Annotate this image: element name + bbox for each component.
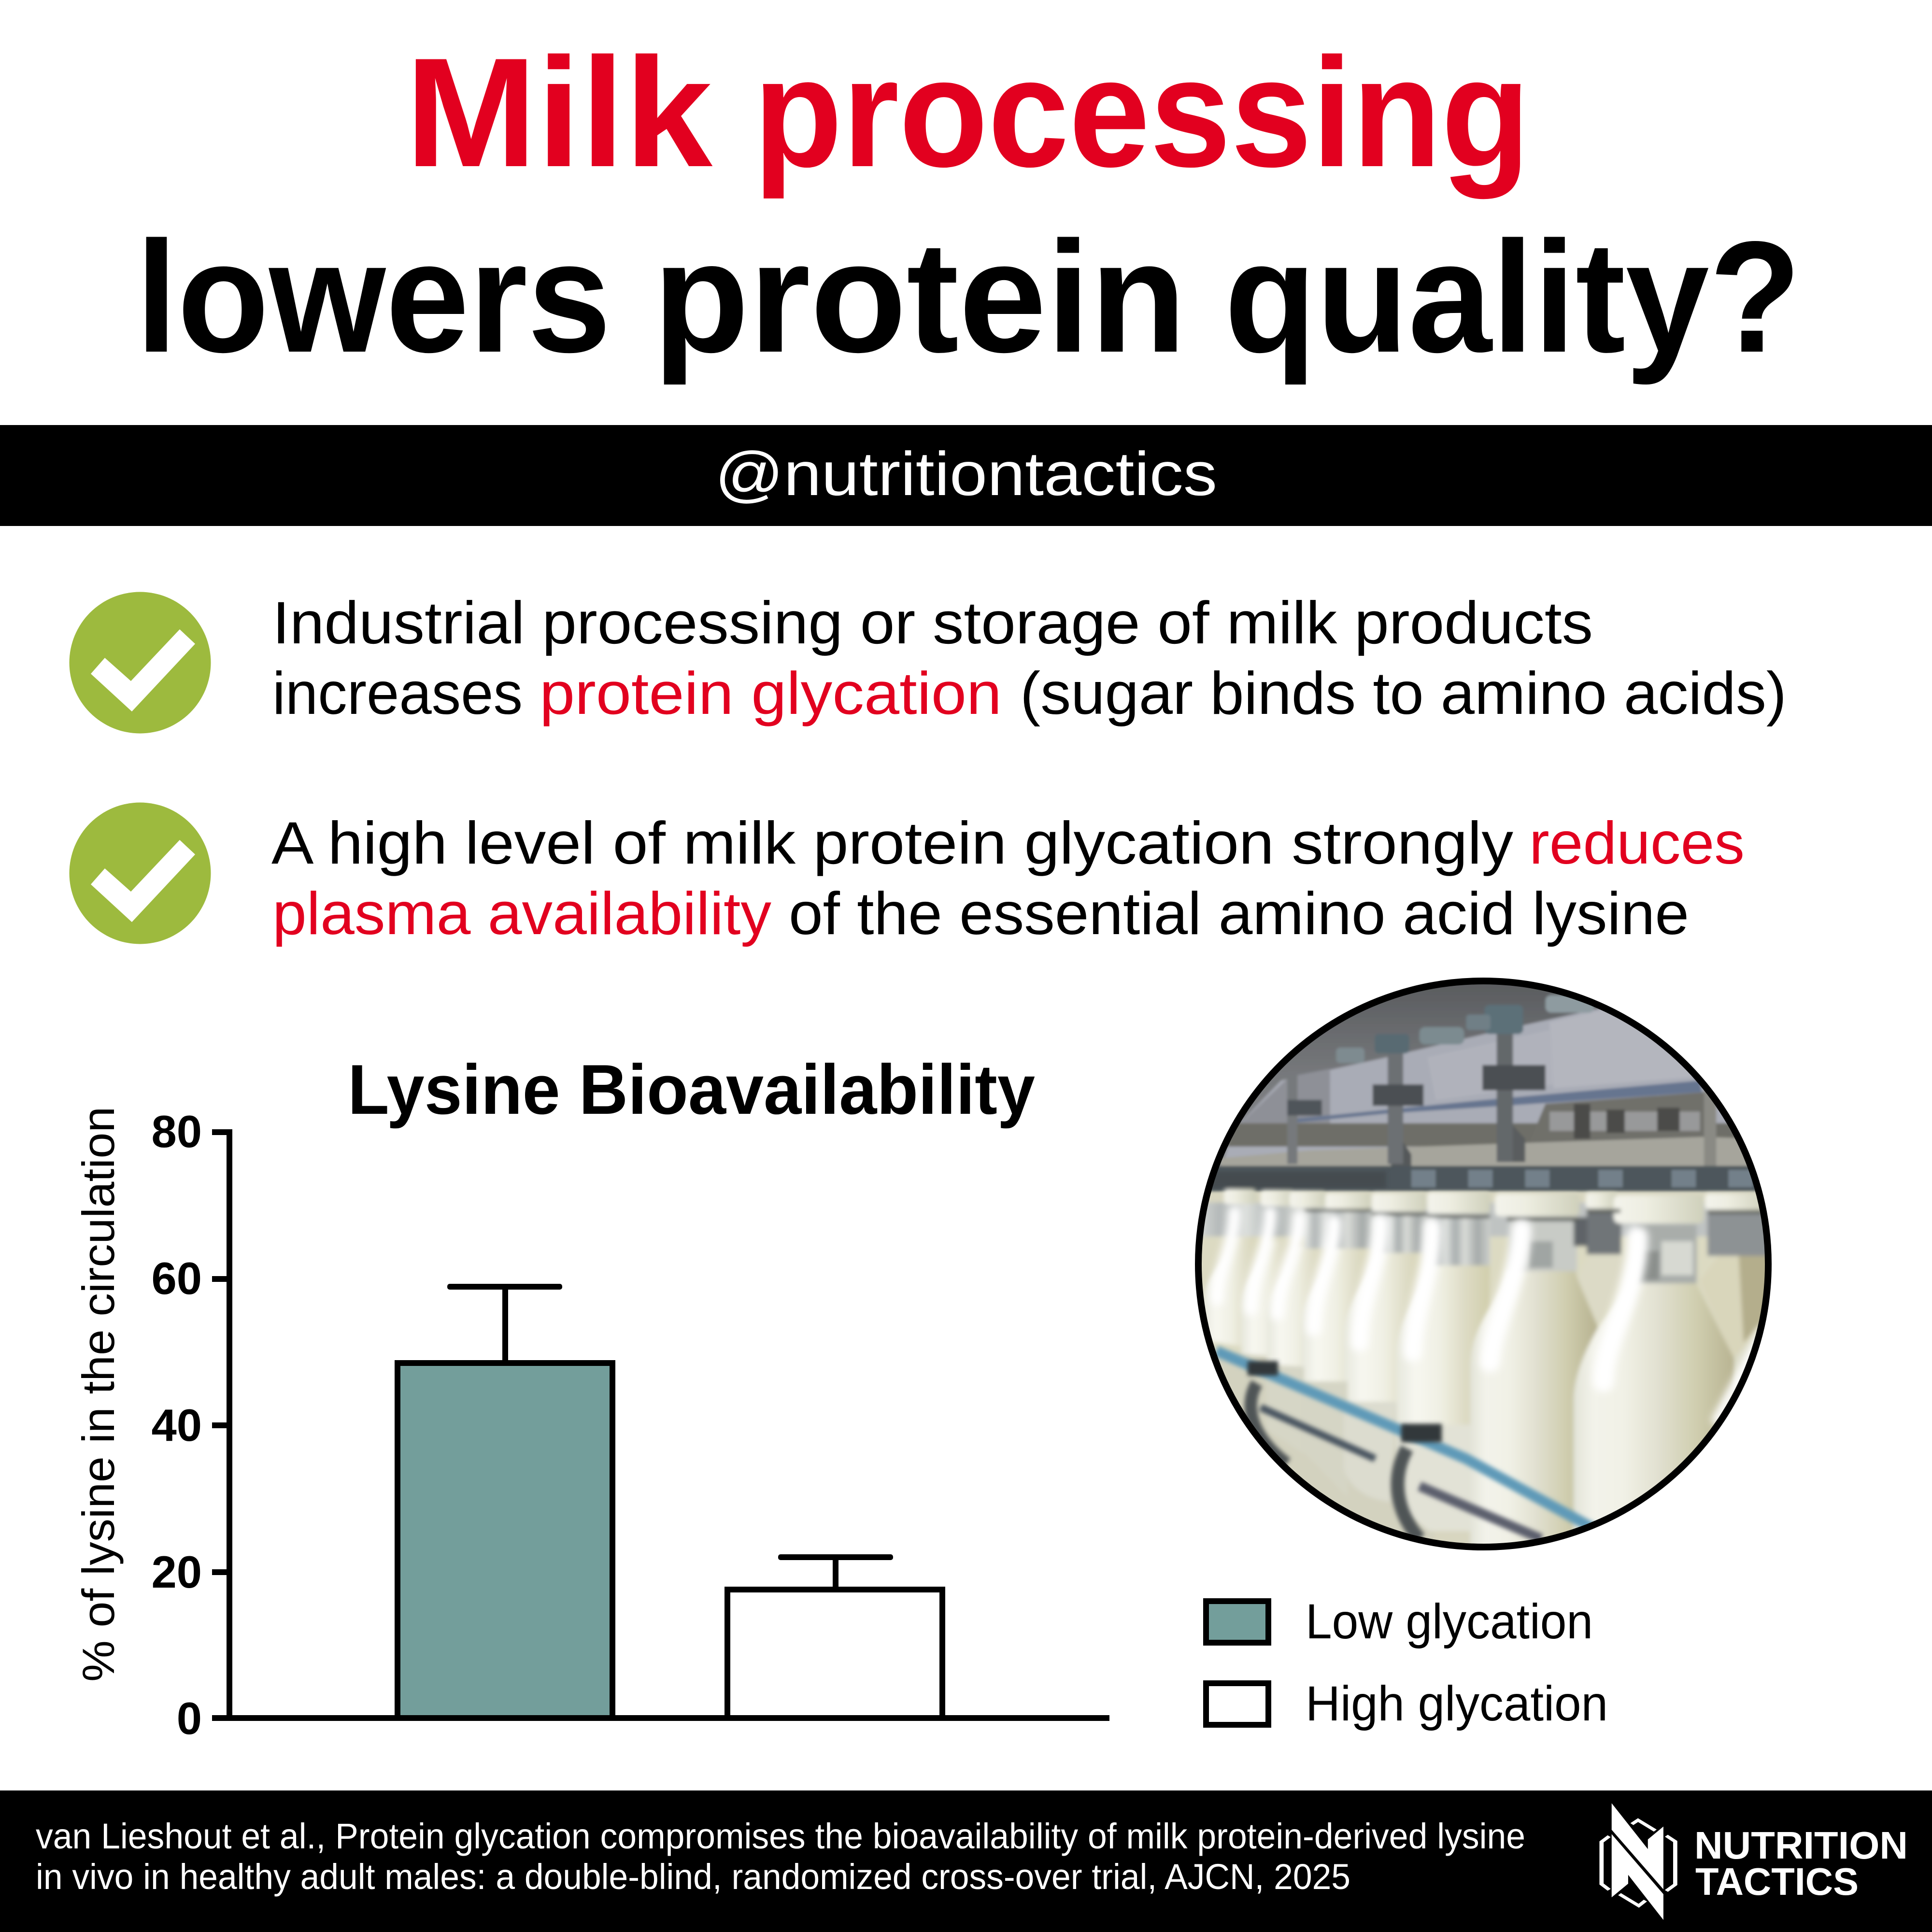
text block: point 2: [271, 810, 1745, 947]
text block: point 2: reduces: [1529, 810, 1745, 877]
bottles 1 to 6: [1203, 1237, 1260, 1347]
text block: point 2: A high level of milk protein glycation strongly: [271, 810, 1513, 877]
lower glass bases: [1302, 1369, 1305, 1379]
text block: point 1: Industrial processing or storage of milk products: [272, 590, 1593, 656]
bar chart: [151, 1106, 1109, 1744]
handle banner: @nutritiontactics: [715, 440, 1217, 509]
y tick labels: 20: [151, 1547, 202, 1597]
glass band behind bottles: [1193, 1203, 1777, 1256]
machine background: [1219, 984, 1601, 1167]
text block: point 1: (sugar binds to amino acids): [1020, 660, 1787, 727]
bottle 8 behind: [1577, 1253, 1623, 1324]
title: lowers protein quality?: [136, 208, 1801, 386]
text block: point 1: increases: [272, 660, 523, 727]
footer band: [0, 1790, 1932, 1932]
icon: check mark 2: [70, 803, 211, 944]
text block: point 2: plasma availability: [272, 881, 771, 947]
bottle 7: [1470, 1271, 1599, 1553]
legend: high glycation: High glycation: [1306, 1676, 1608, 1731]
logo: Nutrition Tactics: TACTICS: [1695, 1860, 1859, 1903]
icon: check mark 1: [70, 592, 211, 733]
dark strip shading: [1193, 1171, 1386, 1188]
text block: point 1: [272, 590, 1787, 727]
legend: low glycation: Low glycation: [1306, 1594, 1593, 1649]
y tick labels: 80: [151, 1106, 202, 1157]
y tick labels: 0: [177, 1693, 202, 1744]
title: Milk processing: processing: [753, 26, 1530, 200]
text block: point 2: of the essential amino acid lysine: [789, 881, 1689, 947]
citation: in vivo in healthy adult males: a double-blind, randomized cross-over trial, AJCN, 2025: [36, 1857, 1350, 1897]
y tick labels: [151, 1106, 202, 1744]
bar: low glycation: [398, 1284, 612, 1718]
title: lowers protein quality?: quality?: [1224, 208, 1801, 386]
title: lowers protein quality?: protein: [653, 208, 1186, 386]
bottle 10: [1700, 1255, 1777, 1358]
title: Milk processing: [405, 26, 1530, 200]
y axis with ticks: [212, 1129, 1109, 1721]
citation: [36, 1816, 1525, 1897]
y tick labels: 40: [151, 1400, 202, 1450]
bottle 9: [1574, 1283, 1739, 1553]
logo: Nutrition Tactics: NUTRITION: [1694, 1824, 1908, 1867]
citation: van Lieshout et al., Protein glycation compromises the bioavailability of milk protein-derived lysine: [36, 1816, 1525, 1856]
posts and heads: [1497, 1030, 1513, 1162]
handle banner: [0, 425, 1932, 526]
y axis label: % of lysine in the circulation: [73, 1107, 124, 1682]
logo: Nutrition Tactics: [1602, 1803, 1908, 1920]
collars: [1304, 1209, 1768, 1221]
photo: milk bottles on production line: [1184, 968, 1785, 1555]
text block: point 1: protein glycation: [540, 660, 1002, 727]
caps: [1224, 1189, 1256, 1204]
highlights: [1217, 1212, 1763, 1420]
conveyor rails: [1216, 1351, 1594, 1539]
y tick labels: 60: [151, 1253, 202, 1304]
title: Milk processing: Milk: [405, 26, 713, 199]
title: lowers protein quality?: lowers: [136, 208, 611, 385]
legend: [1206, 1594, 1608, 1731]
chart title: Lysine Bioavailability: [348, 1050, 1035, 1129]
photo ring: [1198, 981, 1768, 1547]
bar: high glycation: [727, 1554, 942, 1718]
